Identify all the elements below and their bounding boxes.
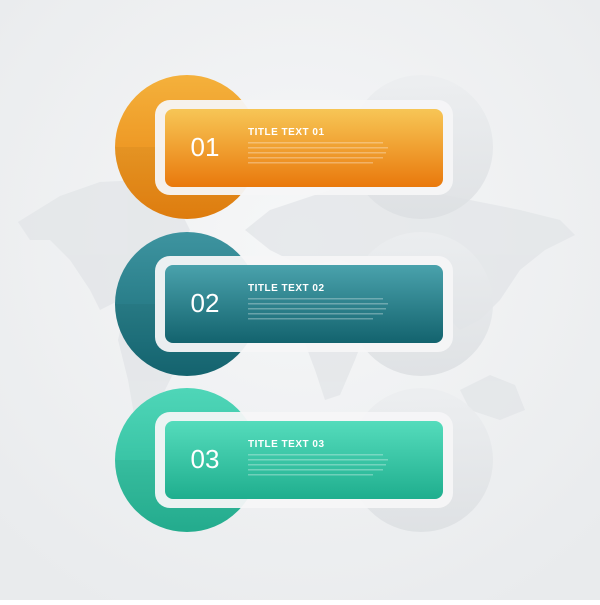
- gray circle right 1: [349, 75, 493, 219]
- orange circle 1: [115, 75, 259, 219]
- body text 02: [248, 298, 388, 320]
- row 1: orange: [115, 75, 493, 219]
- world map background: [18, 180, 575, 430]
- number 01: 01: [191, 132, 219, 162]
- box 1: [165, 109, 443, 187]
- gray circle right 2: [349, 232, 493, 376]
- teal circle 2: [115, 232, 259, 376]
- number 03: 03: [191, 444, 219, 474]
- box 3: [165, 421, 443, 499]
- number 02: 02: [191, 288, 219, 318]
- row 3: green: [115, 388, 493, 532]
- title 01: TITLE TEXT 01: [248, 127, 325, 138]
- gray circle right 3: [349, 388, 493, 532]
- body text 03: [248, 454, 388, 476]
- title 03: TITLE TEXT 03: [248, 439, 325, 450]
- body text 01: [248, 142, 388, 164]
- box 2: [165, 265, 443, 343]
- row 2: teal: [115, 232, 493, 376]
- green circle 3: [115, 388, 259, 532]
- title 02: TITLE TEXT 02: [248, 283, 325, 294]
